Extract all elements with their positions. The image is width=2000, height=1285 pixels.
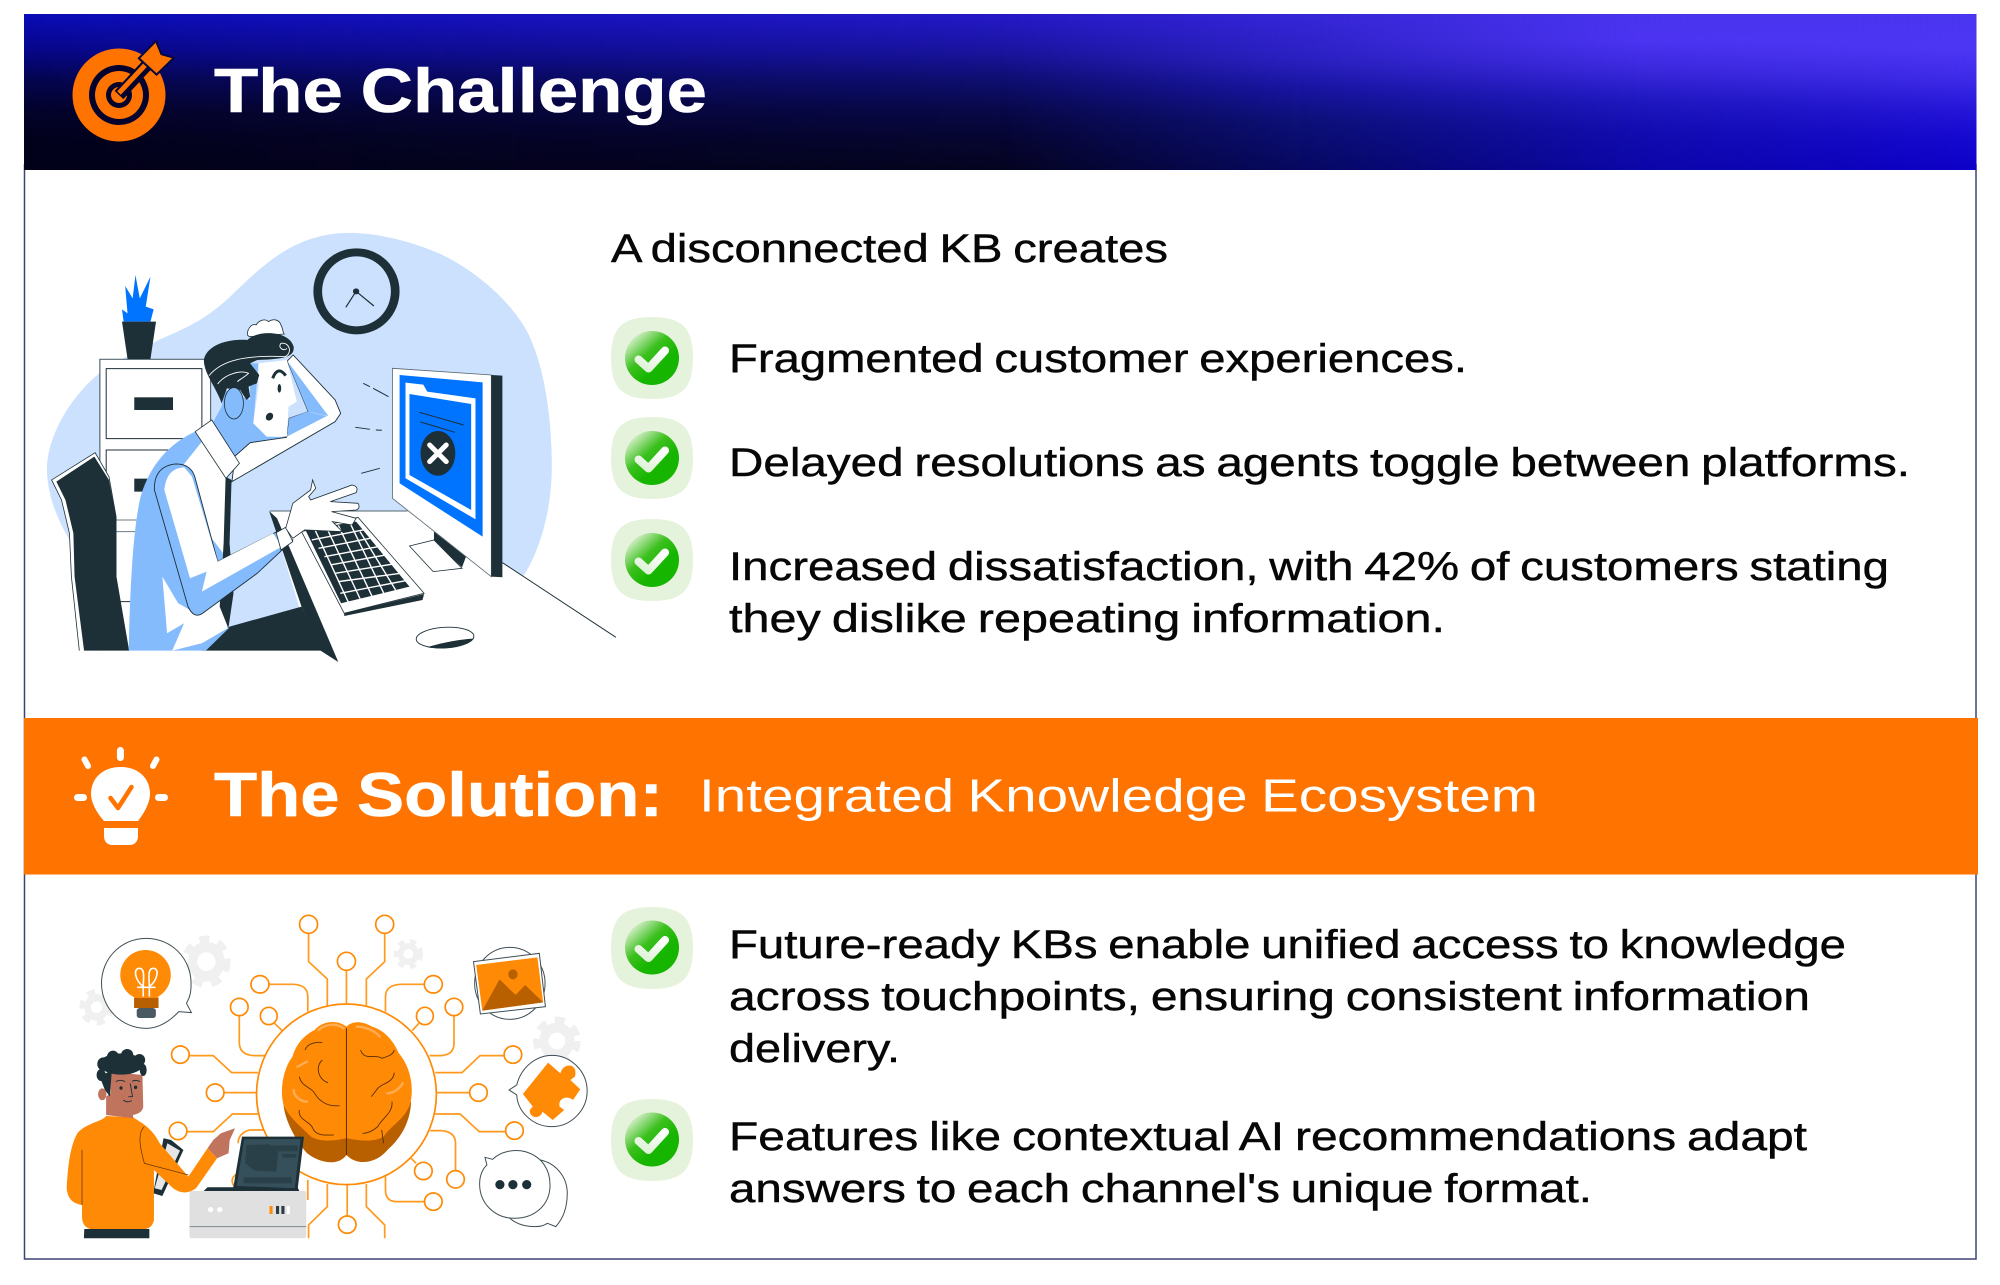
file cabinet: [100, 359, 211, 651]
mouse: [415, 626, 475, 650]
bubble: light bulb: [102, 938, 191, 1028]
bubble: puzzle piece: [509, 1055, 587, 1127]
keyboard: [302, 517, 424, 616]
subheading: Integrated Knowledge Ecosystem: [699, 770, 1538, 822]
circuit nodes: [169, 915, 523, 1233]
face features: [116, 1080, 140, 1102]
pants: [84, 1229, 149, 1238]
desk: [269, 511, 616, 663]
item text: Delayed resolutions as agents toggle between platforms.: [729, 441, 1910, 485]
heading: The Challenge: The Challenge: [214, 57, 707, 126]
hair: [97, 1049, 147, 1097]
item text: Future-ready KBs enable unified access to knowledge: [729, 923, 1846, 967]
brain: [282, 1022, 412, 1162]
torso: [129, 432, 229, 651]
icon: green check: [611, 907, 693, 989]
icon: green check: [611, 519, 693, 601]
man: [129, 320, 359, 651]
heading: A disconnected KB creates: A disconnected KB creates: [611, 227, 1168, 271]
lower arm: [154, 464, 293, 615]
item text: delivery.: [729, 1027, 900, 1071]
list item: delayed resolutions: [611, 417, 1910, 499]
panel: challenge header: [24, 14, 1976, 170]
eye and mouth: [265, 371, 286, 421]
pointing hand: [208, 1128, 235, 1158]
list item: increased dissatisfaction: [611, 519, 1889, 641]
list item: future-ready KBs: [611, 907, 1846, 1071]
hair: [204, 333, 294, 403]
item text: across touchpoints, ensuring consistent information: [729, 975, 1810, 1019]
trousers: [202, 607, 321, 651]
icon: green check: [611, 417, 693, 499]
face: [253, 360, 297, 437]
raised hand: [247, 320, 284, 337]
circuit lines: [187, 933, 506, 1238]
item text: answers to each channel's unique format.: [729, 1167, 1592, 1211]
item text: Increased dissatisfaction, with 42% of customers stating: [729, 545, 1889, 589]
office chair: [52, 453, 129, 651]
monitor: [392, 368, 502, 577]
gears: [82, 939, 577, 1062]
brain ring: [257, 1004, 436, 1185]
clipboard: [153, 1138, 183, 1196]
neck: [213, 363, 287, 473]
tie: [220, 477, 234, 628]
cuff: [276, 527, 293, 550]
bubble: chat: [480, 1150, 567, 1227]
icon: green check: [611, 1099, 693, 1181]
potted plant: [122, 275, 156, 359]
device box with laptop: [190, 1137, 306, 1238]
heading: The Solution: The Solution:: [214, 761, 663, 830]
raised arm: [232, 355, 341, 482]
shirt: [67, 1116, 217, 1229]
icon: green check: [611, 317, 693, 399]
neck and head: [106, 1072, 143, 1118]
item text: [729, 1115, 1807, 1211]
panel: solution header: [24, 718, 1978, 874]
item text: they dislike repeating information.: [729, 597, 1445, 641]
ear: [224, 388, 243, 419]
list item: contextual AI: [611, 1099, 1807, 1211]
illustration: AI brain network with presenter: [67, 915, 587, 1238]
list item: fragmented experiences: [611, 317, 1467, 399]
blob background: [47, 233, 552, 627]
item text: [729, 545, 1889, 641]
icon: target with arrow: [72, 43, 172, 142]
icon: light bulb with check: [74, 747, 168, 845]
motion lines: [355, 383, 389, 473]
item text: Fragmented customer experiences.: [729, 337, 1467, 381]
bubble: picture: [473, 947, 545, 1019]
presenter: [67, 1049, 235, 1238]
hand over keyboard: [286, 480, 359, 538]
item text: [729, 923, 1846, 1071]
illustration: frustrated man at computer: [47, 233, 616, 663]
item text: Features like contextual AI recommendations adapt: [729, 1115, 1807, 1159]
wall clock: [313, 248, 400, 334]
